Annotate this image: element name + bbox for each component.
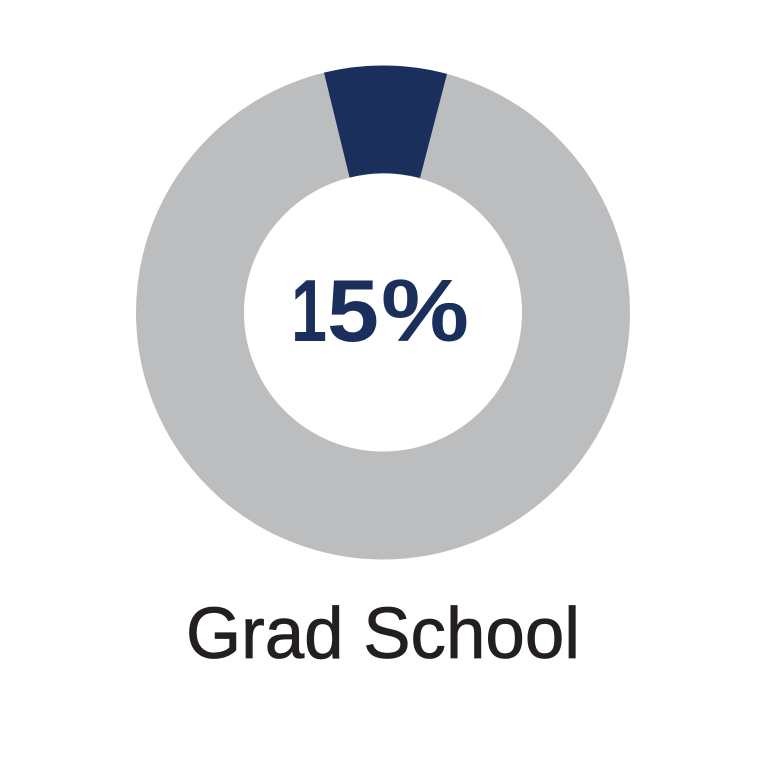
percentage value: % (381, 261, 469, 360)
percentage value: 1 (291, 261, 327, 360)
percentage value (291, 261, 469, 360)
donut remainder segment (190, 120, 576, 506)
donut chart (190, 65, 576, 506)
donut highlighted segment: 15% (324, 65, 447, 178)
percentage value: 5 (327, 261, 379, 360)
label: Grad School: Grad School (186, 594, 580, 674)
